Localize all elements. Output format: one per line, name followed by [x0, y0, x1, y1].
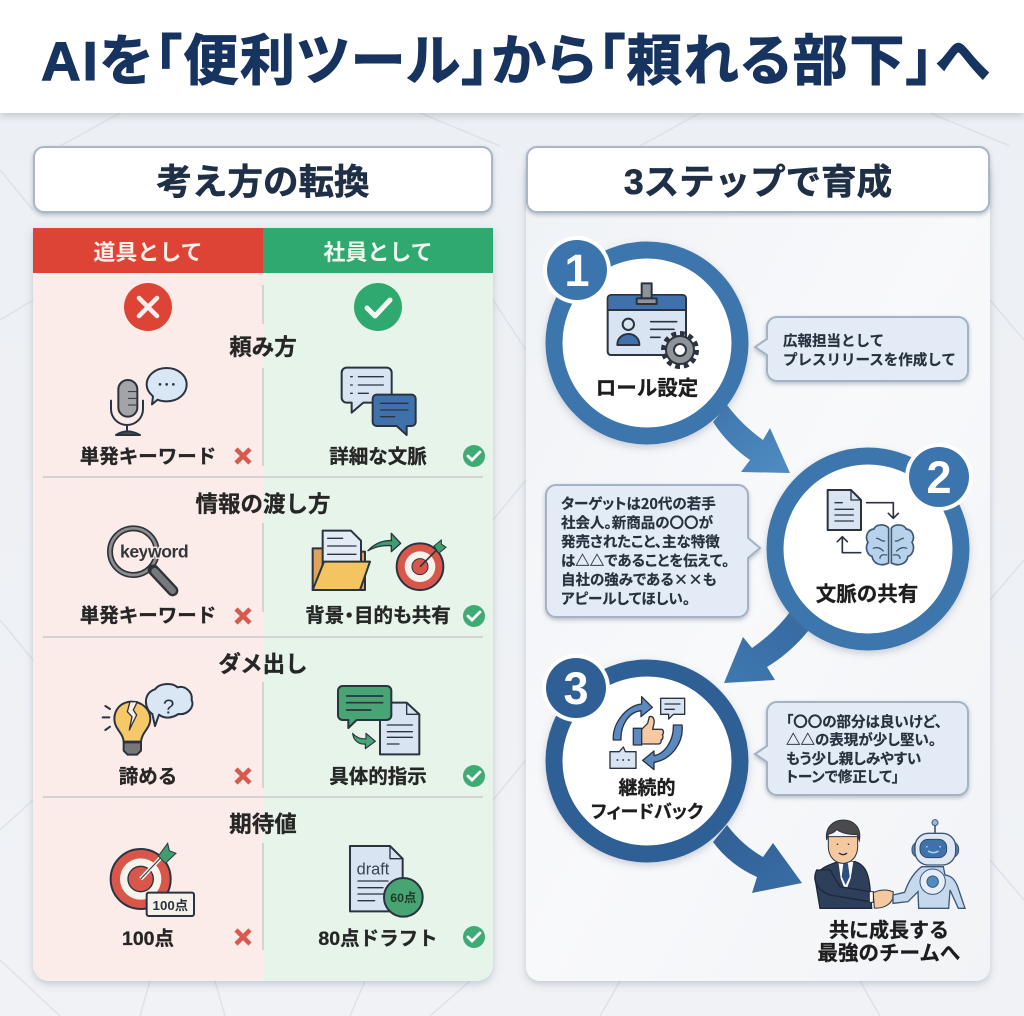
panel: 3ステップで育成: [526, 147, 990, 981]
icon: draft document 60点: [350, 846, 423, 917]
icon: detailed chat bubbles: [342, 368, 416, 435]
team caption: [818, 918, 960, 965]
icon: draft document 60点: draft: [357, 861, 390, 879]
section: 期待値: 期待値: [229, 812, 297, 837]
callout 2: アピールしてほしい。: [561, 588, 690, 609]
icon: broken bulb and question: ?: [163, 695, 174, 718]
panel body left: [33, 228, 493, 981]
step 3 label line 2: フィードバック: [591, 802, 704, 822]
title: AIを「便利ツール」から「頼れる部下」へ: [41, 30, 989, 92]
team caption: 共に成長する: [829, 918, 949, 942]
step 3 circle: [542, 654, 740, 854]
check mark: [463, 605, 485, 627]
label: 背景・目的も共有: 背景・目的も共有: [305, 605, 451, 627]
icon: feedback cycle with thumb: [610, 697, 685, 770]
arrow: step 3 to team: [713, 825, 802, 893]
icon: folder to target: [313, 531, 446, 590]
check mark: [463, 926, 485, 948]
callout 2: 発売されたこと、主な特徴: [561, 531, 720, 552]
section: 情報の渡し方: 情報の渡し方: [195, 492, 331, 517]
title band: [0, 0, 1024, 113]
column header: 道具として: [33, 228, 263, 273]
section: ダメ出し: ダメ出し: [218, 651, 308, 677]
label: 80点ドラフト: 80点ドラフト: [318, 928, 438, 950]
label: 具体的指示: 具体的指示: [329, 766, 427, 788]
column header: 社員として: [263, 228, 493, 273]
left column background: [33, 273, 263, 981]
icon: keyword magnifier: keyword: [120, 541, 189, 561]
icon: keyword magnifier: [110, 528, 189, 591]
label: 単発キーワード: 単発キーワード: [80, 446, 216, 468]
cross mark: [236, 609, 250, 623]
icon: big cross: [124, 283, 172, 331]
icon: target 100点: 100点: [153, 898, 188, 913]
label: 単発キーワード: 単発キーワード: [80, 605, 216, 627]
heading: 3ステップで育成: [624, 162, 892, 202]
step 2 label: 文脈の共有: [816, 583, 918, 606]
callout 1: プレスリリースを作成して: [783, 349, 956, 370]
section: 頼み方: 頼み方: [229, 335, 297, 360]
icon: target 100点: [111, 843, 194, 916]
heading box: [34, 147, 492, 212]
check mark: [463, 445, 485, 467]
icon: ID card and gear: [608, 283, 696, 366]
cross mark: [236, 769, 250, 783]
panel: 考え方の転換: [33, 147, 493, 981]
callout 2: [546, 485, 760, 617]
step 1 circle: [543, 236, 740, 436]
badge 2: [905, 443, 973, 511]
label: 詳細な文脈: 詳細な文脈: [329, 445, 427, 468]
icon: document and brain: [828, 490, 913, 565]
callout 1: 広報担当として: [783, 330, 884, 351]
callout 3: もう少し親しみやすい: [786, 748, 921, 769]
cross mark: [236, 449, 250, 463]
icon: businessman and robot handshake: [815, 820, 965, 908]
cross mark: [236, 930, 250, 944]
arrow: step 1 to 2: [713, 405, 790, 473]
callout 3: 「〇〇の部分は良いけど、: [786, 711, 942, 732]
callout 3: [755, 702, 968, 795]
callout 3: トーンで修正して」: [786, 766, 899, 787]
arrow: step 2 to 3: [724, 612, 815, 683]
callout 2: 社会人。新商品の〇〇が: [561, 512, 714, 533]
panel body: [526, 160, 990, 981]
badge 3: 3: [563, 663, 589, 714]
callout 1: [755, 317, 968, 381]
callout 2: 自社の強みである××も: [561, 569, 717, 590]
badge 3: [542, 654, 610, 722]
callout 3: △△の表現が少し堅い。: [786, 729, 936, 750]
badge 2: 2: [926, 452, 952, 503]
step 2 circle: [775, 443, 973, 642]
badge 1: [543, 236, 611, 304]
check mark: [463, 765, 485, 787]
label: 諦める: 諦める: [119, 766, 177, 788]
icon: microphone and bubble: [111, 368, 187, 435]
icon: draft document 60点: 60点: [390, 890, 416, 905]
team caption: 最強のチームへ: [818, 942, 960, 965]
label: 100点: 100点: [122, 928, 174, 950]
icon: feedback bubble and document: [338, 686, 419, 754]
step 1 label: ロール設定: [596, 377, 698, 400]
icon: broken bulb and question: [103, 684, 192, 755]
badge 1: 1: [564, 245, 590, 296]
column header: 道具として: 道具として: [93, 240, 203, 265]
icon: big check: [354, 283, 402, 331]
column header: 社員として: 社員として: [323, 240, 433, 265]
callout 2: ターゲットは20代の若手: [561, 493, 716, 514]
heading: 考え方の転換: [156, 162, 370, 202]
step 3 label: 継続的: [618, 777, 676, 799]
heading box: [527, 147, 989, 212]
callout 2: は△△であることを伝えて。: [561, 550, 729, 571]
